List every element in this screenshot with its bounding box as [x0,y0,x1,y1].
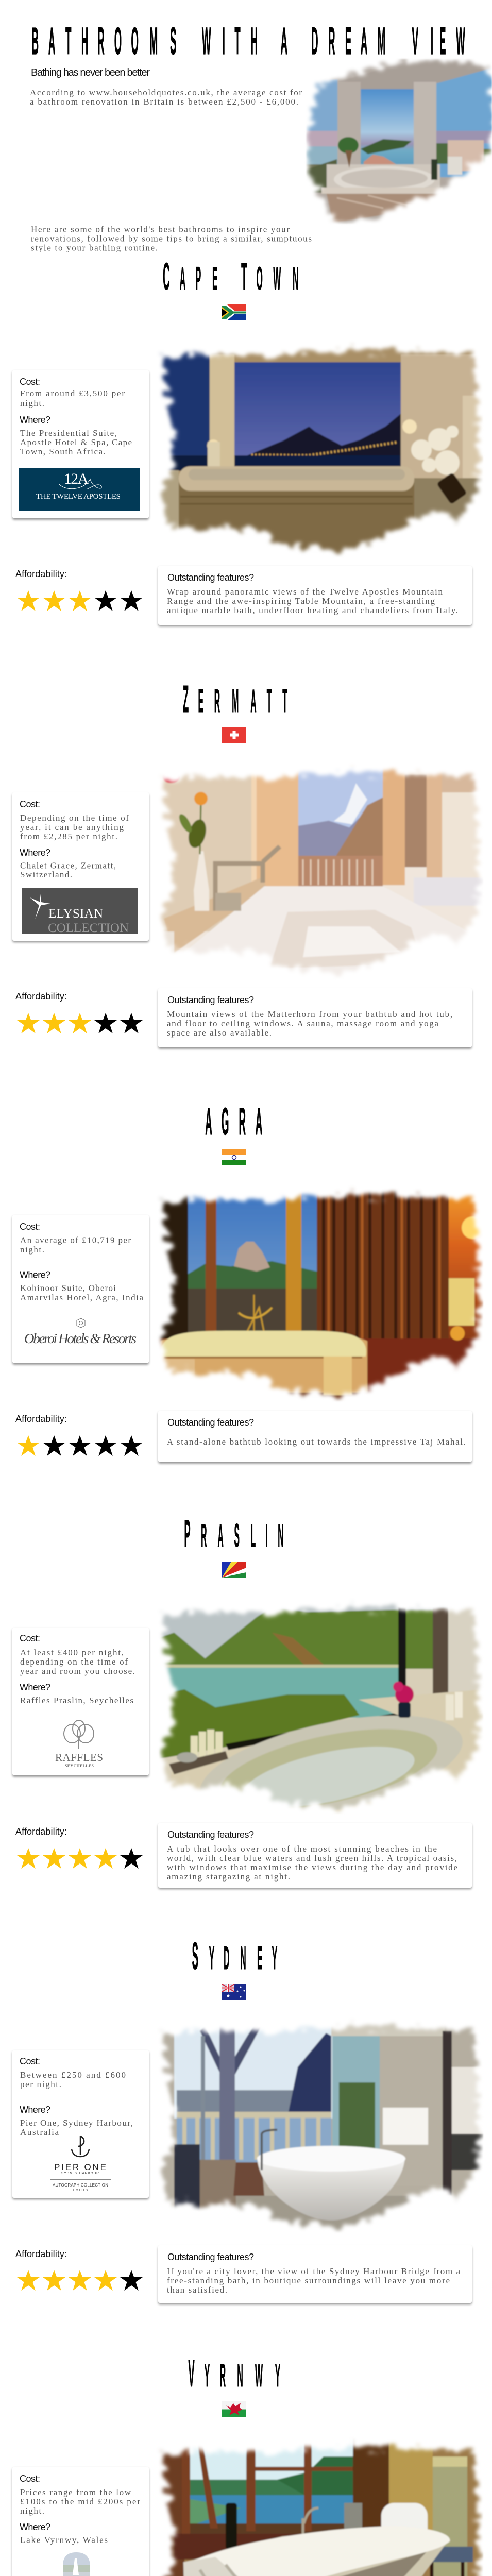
logo: Pier One Sydney Harbour: SYDNEY HARBOUR [61,2172,99,2175]
photo: marble bath with Table Mountain view [158,343,483,557]
heading: Praslin: P [184,1513,191,1555]
heading: Vyrnwy: YRNWY [205,2357,280,2394]
card: outstanding features: Wrap around panoramic views of the Twelve Apostles Mountain [167,587,443,597]
flag: Wales [222,2401,246,2417]
card: outstanding features [158,988,472,1047]
card: cost and where: night. [20,2506,44,2516]
card: cost and where: per night. [20,2079,61,2089]
subtitle: Bathing has never been better [31,67,150,78]
outro paragraph [31,225,312,253]
card: cost and where: Switzerland. [20,870,72,879]
card: cost and where: Where? [20,415,50,425]
section: Vyrnwy [12,2352,483,2576]
affordability rating: 4 of 5: Affordability: [15,1826,67,1837]
card: cost and where: Where? [20,2105,50,2115]
outro paragraph: Here are some of the world's best bathrooms to inspire your [31,225,290,234]
photo: tub overlooking Praslin beach [159,1602,483,1814]
heading: Zermatt: Z [183,678,189,720]
logo: Pier One Sydney Harbour: HOTELS [73,2189,88,2192]
flag: Australia [222,1984,246,2000]
card: outstanding features: A stand-alone bathtub looking out towards the impressive Taj Mahal. [167,1437,466,1447]
logo: Pier One Sydney Harbour: AUTOGRAPH COLLECTION [53,2183,108,2188]
card: cost and where: Amarvilas Hotel, Agra, India [20,1293,143,1302]
section: Zermatt [12,678,483,1047]
heading: Cape Town: APE [180,260,230,297]
heading: Cape Town: C [163,256,169,298]
section: Praslin [12,1513,483,1888]
card: cost and where [12,2050,149,2198]
card: cost and where: From around £3,500 per [20,388,125,398]
card: outstanding features: with windows that maximise the views during the day and provide [167,1862,457,1872]
card: cost and where: from £2,285 per night. [20,832,117,841]
card: cost and where: Between £250 and £600 [20,2070,126,2080]
card: cost and where: The Presidential Suite, [20,428,117,438]
card: cost and where: Chalet Grace, Zermatt, [20,860,116,871]
logo: Oberoi Hotels & Resorts [24,1318,137,1346]
heading: Zermatt: ERMATT [198,682,287,719]
card: cost and where: Cost: [20,2056,40,2066]
card: outstanding features [158,1411,472,1462]
photo: roll-top bath with Lake Vyrnwy view [159,2440,484,2576]
card: outstanding features [158,2245,472,2303]
heading: Cape Town: OWN [257,260,298,297]
section: Agra [12,1100,484,1462]
card: outstanding features [158,1823,472,1888]
logo: The Twelve Apostles: 12A [64,470,89,487]
card: outstanding features: A tub that looks over one of the most stunning beaches in the [167,1844,437,1854]
affordability rating: 1 of 5: Affordability: [15,1414,67,1424]
card: outstanding features: and floor to ceiling windows. A sauna, massage room and yoga [167,1019,438,1028]
card: cost and where: £100s to the mid £200s per [20,2497,140,2506]
card: cost and where [12,792,149,941]
card: cost and where: Australia [20,2127,59,2137]
card: cost and where: Apostle Hotel & Spa, Cape [20,437,132,447]
card: cost and where: Lake Vyrnwy, Wales [20,2535,108,2545]
affordability rating: 4 of 5: Affordability: [15,2249,67,2259]
card: cost and where: Cost: [20,1222,40,1232]
card: cost and where: Where? [20,1682,50,1692]
logo: Elysian Collection: COLLECTION [48,921,129,935]
card: cost and where: At least £400 per night, [20,1648,124,1657]
intro paragraph: a bathroom renovation in Britain is between £2,500 - £6,000. [30,97,298,107]
card: cost and where: Cost: [20,2473,40,2484]
logo: Elysian Collection: ELYSIAN [48,907,103,921]
card: cost and where: depending on the time of [20,1657,128,1667]
heading: Agra: AGRA [205,1100,262,1143]
section: Cape Town [12,256,483,625]
card: cost and where [12,1215,149,1363]
card: cost and where: Kohinoor Suite, Oberoi [20,1283,116,1293]
section: Sydney [12,1935,483,2303]
heading: Praslin: RASLIN [201,1517,284,1554]
logo: Pier One Sydney Harbour: PIER ONE [54,2162,106,2172]
card: cost and where [12,370,149,518]
card: outstanding features: Range and the awe-inspiring Table Mountain, a free-standing [167,596,435,606]
affordability rating: 3 of 5: Affordability: [15,991,67,1002]
card: cost and where: Where? [20,848,50,858]
logo: Raffles Seychelles: SEYCHELLES [65,1764,94,1768]
photo: bath with Matterhorn view [159,767,483,977]
photo: tub with Taj Mahal view [158,1187,484,1401]
title: BATHROOMS WITH A DREAM VIEW [32,20,465,62]
card: outstanding features: Mountain views of the Matterhorn from your bathtub and hot tub, [167,1009,452,1019]
photo: free-standing tub with Sydney Harbour Bridge view [159,2021,484,2233]
card: cost and where: year, it can be anything [20,822,124,832]
card: outstanding features: Outstanding features? [167,2252,254,2262]
card: outstanding features: world, with clear blue waters and lush green hills. A tropical oasis, [167,1853,457,1863]
intro paragraph [30,88,302,107]
outro paragraph: renovations, followed by some tips to bring a similar, sumptuous [31,234,312,243]
affordability rating: 3 of 5 [15,569,143,611]
heading: Sydney: YDNEY [209,1939,277,1976]
card: outstanding features [158,566,472,625]
affordability rating: 1 of 5 [15,1414,143,1456]
card: outstanding features: free-standing bath, in boutique surroundings will leave you more [167,2276,450,2285]
card: cost and where: Cost: [20,1633,40,1643]
logo: The Twelve Apostles [19,468,140,511]
affordability rating: 3 of 5 [15,991,143,1033]
logo: Lake Vyrnwy Hotel & Spa [38,2552,117,2576]
logo: Raffles Seychelles: RAFFLES [55,1751,103,1764]
logo: Pier One Sydney Harbour [50,2136,111,2192]
card: cost and where [12,2467,149,2576]
card: cost and where: Prices range from the low [20,2487,131,2497]
card: outstanding features: Outstanding features? [167,572,254,583]
flag: South Africa [222,304,246,320]
card: cost and where: Cost: [20,799,40,809]
card: outstanding features: than satisfied. [167,2285,227,2295]
card: outstanding features: antique marble bath, underfloor heating and chandeliers from Italy. [167,605,458,615]
card: cost and where: An average of £10,719 per [20,1235,131,1245]
card: outstanding features: Outstanding features? [167,1829,254,1840]
card: outstanding features: amazing stargazing at night. [167,1872,290,1882]
flag: Switzerland [222,727,246,743]
card: cost and where: Depending on the time of [20,813,129,823]
card: cost and where: Town, South Africa. [20,447,106,456]
card: cost and where: night. [20,398,44,408]
card: outstanding features: Outstanding features? [167,1417,254,1428]
flag: India [222,1149,246,1165]
outro paragraph: style to your bathing routine. [31,243,158,253]
heading: Sydney: S [192,1935,198,1977]
card: cost and where: Pier One, Sydney Harbour, [20,2118,133,2128]
heading: Vyrnwy: V [188,2352,195,2395]
affordability rating: 3 of 5: Affordability: [15,569,67,579]
logo: Elysian Collection [22,888,138,935]
logo: The Twelve Apostles: THE TWELVE APOSTLES [36,493,121,501]
card: cost and where: Raffles Praslin, Seychelles [20,1696,133,1705]
card: cost and where: year and room you choose. [20,1666,135,1676]
hero photo [306,58,492,225]
card: outstanding features: Outstanding features? [167,995,254,1005]
card: cost and where: Cost: [20,377,40,387]
card: outstanding features: space are also available. [167,1028,272,1038]
card: cost and where: Where? [20,2522,50,2532]
affordability rating: 4 of 5 [15,2249,143,2291]
card: cost and where: Where? [20,1270,50,1280]
heading: Cape Town: T [241,256,247,298]
logo: Raffles Seychelles [55,1720,103,1768]
affordability rating: 4 of 5 [15,1826,143,1869]
card: outstanding features: If you're a city lover, the view of the Sydney Harbour Bridge from a [167,2266,460,2276]
card: cost and where [12,1628,149,1775]
flag: Seychelles [222,1562,246,1578]
logo: Oberoi Hotels & Resorts: Oberoi Hotels & Resorts [24,1331,137,1346]
card: cost and where: night. [20,1245,44,1255]
intro paragraph: According to www.householdquotes.co.uk, the average cost for [30,88,302,97]
